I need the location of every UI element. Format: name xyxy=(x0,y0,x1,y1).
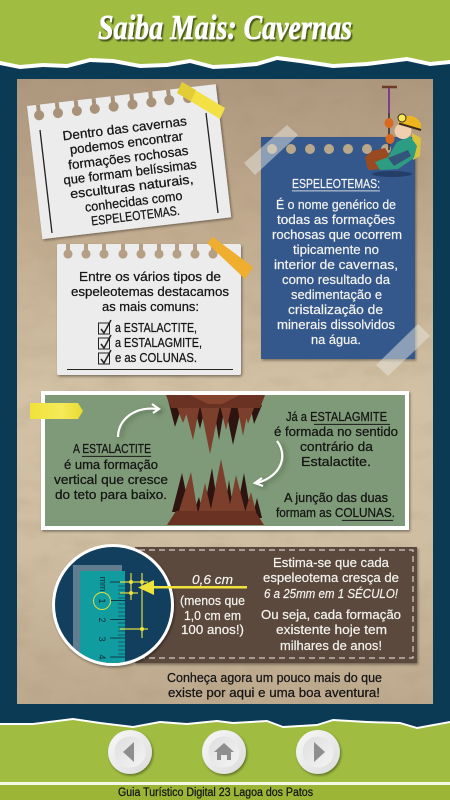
growth text: espeleotema cresça de xyxy=(263,570,399,585)
stalactite text xyxy=(54,441,168,502)
measurement text: 0,6 cm xyxy=(192,572,233,587)
note: list of types xyxy=(57,244,241,375)
intro text: podemos encontrar xyxy=(69,128,185,157)
checklist: a ESTALAGMITE, xyxy=(115,335,202,350)
definition text: tipicamente no xyxy=(293,242,379,257)
definition heading: ESPELEOTEMAS: xyxy=(292,176,380,191)
definition text: como resultado da xyxy=(282,272,391,287)
definition text: rochosas que ocorrem xyxy=(272,227,402,242)
checklist xyxy=(98,320,202,365)
closing text xyxy=(167,670,382,700)
translucent tape bottom xyxy=(376,324,430,376)
measurement text: (menos que xyxy=(180,593,245,608)
growth text: milhares de anos! xyxy=(280,638,382,653)
closing text: Conheça agora um pouco mais do que xyxy=(167,670,382,685)
icon: ruler magnifier: mm xyxy=(98,576,108,592)
button: previous xyxy=(108,730,152,774)
stalactite text: A ESTALACTITE xyxy=(73,441,151,456)
translucent tape top xyxy=(244,125,298,175)
stalagmite text: Estalactite. xyxy=(301,454,371,469)
measurement text xyxy=(180,572,245,637)
checklist: a ESTALACTITE, xyxy=(115,320,197,335)
icon: caver on rope xyxy=(365,87,421,177)
intro text: ESPELEOTEMAS. xyxy=(90,203,180,229)
intro text: conhecidas como xyxy=(84,188,183,215)
intro text: que formam belíssimas xyxy=(63,156,198,188)
growth text: 6 a 25mm em 1 SÉCULO! xyxy=(264,586,398,601)
header band xyxy=(0,0,450,69)
columns text: A junção das duas xyxy=(284,490,388,505)
arrow: measurement pointer xyxy=(138,580,247,595)
intro text xyxy=(57,113,203,231)
columns text xyxy=(276,490,395,521)
arrow: up to stalactites xyxy=(118,404,159,437)
arrow: down to stalagmites xyxy=(255,441,282,486)
measurement text: 100 anos!) xyxy=(181,622,244,637)
list intro text: as mais comuns: xyxy=(102,299,199,314)
definition text: todas as formações xyxy=(277,212,396,227)
growth text: Ou seja, cada formação xyxy=(261,607,401,622)
title: Saiba Mais: Cavernas xyxy=(98,8,352,47)
stalactite text: é uma formação xyxy=(64,457,158,472)
columns text: formam as COLUNAS. xyxy=(276,505,395,520)
orange tape xyxy=(207,237,253,279)
illustration: stalagmites xyxy=(167,459,264,525)
definition text: cristalização de xyxy=(288,302,383,317)
stalagmite text: contrário da xyxy=(300,439,374,454)
growth text: Estima-se que cada xyxy=(273,555,390,570)
icon: ruler magnifier xyxy=(52,544,174,675)
definition text: interior de cavernas, xyxy=(274,257,398,272)
stalactite text: do teto para baixo. xyxy=(55,487,167,502)
growth text xyxy=(261,555,401,653)
list intro text xyxy=(71,269,229,314)
list intro text: espeleotemas destacamos xyxy=(71,284,229,299)
textured tan panel xyxy=(17,79,433,704)
list intro text: Entre os vários tipos de xyxy=(79,269,221,284)
footer band xyxy=(0,718,450,800)
panel: stalactite and stalagmite xyxy=(43,393,407,528)
growth text: existente hoje tem xyxy=(276,622,387,637)
button: home xyxy=(202,730,246,774)
yellow tape xyxy=(177,82,225,119)
intro text: formações rochosas xyxy=(67,143,190,172)
definition text: na água. xyxy=(311,332,361,347)
definition text: sedimentação e xyxy=(291,287,382,302)
icon: ruler magnifier: 4 xyxy=(97,654,107,660)
icon: ruler magnifier: 3 xyxy=(97,636,107,642)
definition text xyxy=(272,197,402,347)
definition text: minerais dissolvidos xyxy=(277,317,395,332)
stalagmite text: Já a ESTALAGMITE xyxy=(286,409,387,424)
panel: growth rate xyxy=(135,547,417,663)
intro text: esculturas naturais, xyxy=(69,171,194,201)
stalactite text: vertical que cresce xyxy=(54,472,168,487)
closing text: existe por aqui e uma boa aventura! xyxy=(168,685,380,700)
note: intro paper xyxy=(27,84,231,239)
note: blue definition xyxy=(261,137,415,359)
checklist: e as COLUNAS. xyxy=(115,350,197,365)
stalagmite text xyxy=(274,409,398,469)
illustration: stalactites xyxy=(166,395,265,454)
definition text: É o nome genérico de xyxy=(276,197,396,212)
icon: ruler magnifier: 2 xyxy=(97,617,107,623)
intro text: Dentro das cavernas xyxy=(62,113,188,143)
icon: ruler magnifier: 1 xyxy=(97,598,107,604)
stalagmite text: é formada no sentido xyxy=(274,424,398,439)
footer text: Guia Turístico Digital 23 Lagoa dos Patos xyxy=(118,787,313,799)
button: next xyxy=(296,730,340,774)
measurement text: 1,0 cm em xyxy=(184,608,241,623)
yellow label tab xyxy=(30,403,83,419)
